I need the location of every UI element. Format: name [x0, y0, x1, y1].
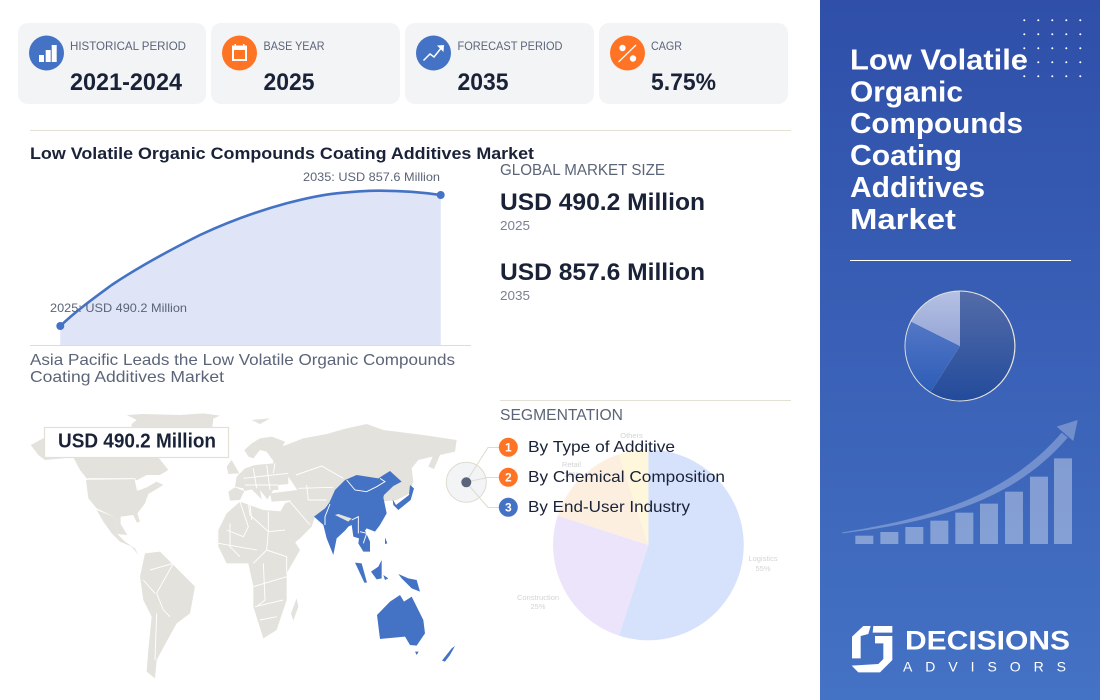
label: CAGR: CAGR	[651, 39, 682, 53]
label: historical period: HISTORICAL PERIOD	[70, 39, 186, 53]
sidebar title	[850, 44, 1028, 236]
callout: map value: USD 490.2 Million	[58, 430, 216, 452]
decorative dot grid	[1023, 19, 1081, 77]
faded pie chart behind segmentation: Logistics	[748, 554, 778, 563]
logo subline: ADVISORS	[903, 658, 1066, 674]
year: 2035: 2035	[500, 288, 530, 303]
stat card: CAGR	[599, 23, 788, 104]
data label: 2025: 2025: USD 490.2 Million	[50, 301, 187, 315]
icon: trend arrow	[416, 36, 451, 70]
segment: by type of additive	[499, 438, 675, 457]
callout: map value	[44, 428, 228, 458]
faded pie chart behind segmentation: Retail	[562, 460, 581, 469]
faded pie chart behind segmentation: 15%	[564, 470, 579, 479]
value: 2021-2024: 2021-2024	[70, 69, 183, 96]
heading: segmentation: SEGMENTATION	[500, 407, 623, 424]
sidebar title: Coating	[850, 140, 962, 172]
value: 5.75%: 5.75%	[651, 69, 716, 96]
segment: by end-user industry: By End-User Industry	[528, 499, 690, 516]
faded pie chart behind segmentation: 55%	[755, 564, 771, 573]
sidebar title: Low Volatile	[850, 44, 1028, 76]
highlighted region: Asia Pacific	[314, 471, 455, 662]
area chart: market growth 2025 to 2035	[30, 170, 471, 346]
segment: by chemical composition: By Chemical Composition	[528, 469, 725, 486]
faded pie chart behind segmentation: Others	[620, 431, 643, 440]
heading: regional leader: Coating Additives Market	[30, 369, 225, 386]
stat card: historical period	[18, 23, 206, 104]
value: 2025: 2025	[264, 69, 314, 96]
logo: Decisions Advisors	[852, 626, 1070, 674]
panel: right sidebar background	[820, 0, 1100, 700]
segment: by end-user industry: 3	[505, 500, 512, 514]
icon: calendar	[222, 36, 257, 70]
lens: zoom connector	[446, 448, 500, 508]
sidebar title: Market	[850, 204, 956, 236]
label: base year: BASE YEAR	[264, 39, 325, 53]
sidebar title: Compounds	[850, 108, 1023, 140]
block: global market size	[500, 162, 705, 303]
world map	[31, 413, 457, 678]
value: 2035: 2035	[458, 69, 508, 96]
stat card: forecast period	[405, 23, 594, 104]
value: 2025 market size: USD 490.2 Million	[500, 189, 705, 216]
stat card: base year	[211, 23, 400, 104]
label: forecast period: FORECAST PERIOD	[458, 39, 563, 53]
heading: regional leader	[30, 352, 455, 386]
year: 2025: 2025	[500, 218, 530, 233]
sidebar title: Organic	[850, 76, 963, 108]
heading: global market size: GLOBAL MARKET SIZE	[500, 162, 665, 179]
logo wordmark: DECISIONS	[905, 626, 1070, 656]
faded pie chart behind segmentation	[517, 431, 778, 640]
faded pie chart behind segmentation: Construction	[517, 593, 559, 602]
sidebar title: Additives	[850, 172, 985, 204]
heading: regional leader: Asia Pacific Leads the Low Volatile Organic Compounds	[30, 352, 455, 369]
icon: bar chart	[29, 36, 64, 70]
icon: glossy pie chart	[904, 290, 1016, 402]
icon: percent	[610, 36, 645, 70]
icon: rising bars and arrow	[842, 420, 1078, 544]
data label: 2035: 2035: USD 857.6 Million	[303, 170, 440, 184]
value: 2035 market size: USD 857.6 Million	[500, 259, 705, 286]
segment: by chemical composition: 2	[505, 470, 512, 484]
heading: market title: Low Volatile Organic Compounds Coating Additives Market	[30, 144, 534, 163]
logo mark	[852, 626, 892, 672]
segment: by type of additive: 1	[505, 440, 512, 454]
faded pie chart behind segmentation: 25%	[530, 602, 546, 611]
segment: by type of additive: By Type of Additive	[528, 439, 675, 456]
